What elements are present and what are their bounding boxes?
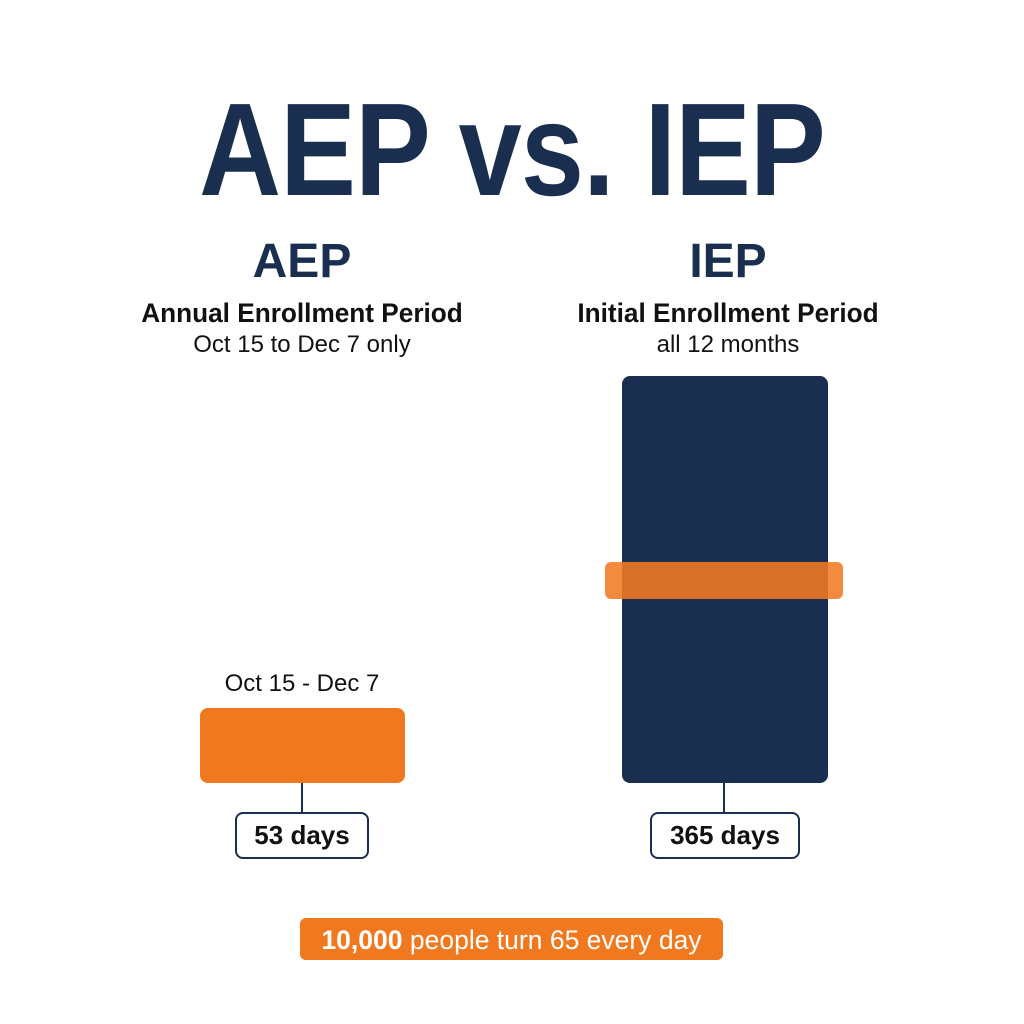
label box: 365 days: 365 days bbox=[670, 820, 780, 850]
connector bbox=[301, 783, 303, 813]
bar: IEP navy bbox=[622, 376, 828, 783]
highlight band bbox=[605, 562, 843, 599]
note: all 12 months bbox=[657, 331, 799, 358]
label: Oct 15 - Dec 7: Oct 15 - Dec 7 bbox=[225, 670, 379, 697]
callout: footer: 10,000 people turn 65 every day bbox=[321, 925, 702, 955]
subtitle: Initial Enrollment Period bbox=[577, 298, 879, 328]
connector bbox=[723, 783, 725, 813]
title: AEP vs. IEP bbox=[199, 76, 825, 223]
callout: footer bbox=[300, 918, 723, 960]
subtitle: Annual Enrollment Period bbox=[141, 298, 463, 328]
label box: 53 days: 53 days bbox=[254, 820, 350, 850]
panel: IEP header bbox=[577, 235, 879, 358]
label box: 53 days bbox=[235, 812, 369, 859]
bar: AEP orange bbox=[200, 708, 405, 783]
panel: AEP header bbox=[141, 235, 463, 358]
label box: 365 days bbox=[650, 812, 800, 859]
heading: AEP: AEP bbox=[253, 235, 351, 288]
note: Oct 15 to Dec 7 only bbox=[193, 331, 411, 358]
heading: IEP: IEP bbox=[689, 235, 767, 288]
